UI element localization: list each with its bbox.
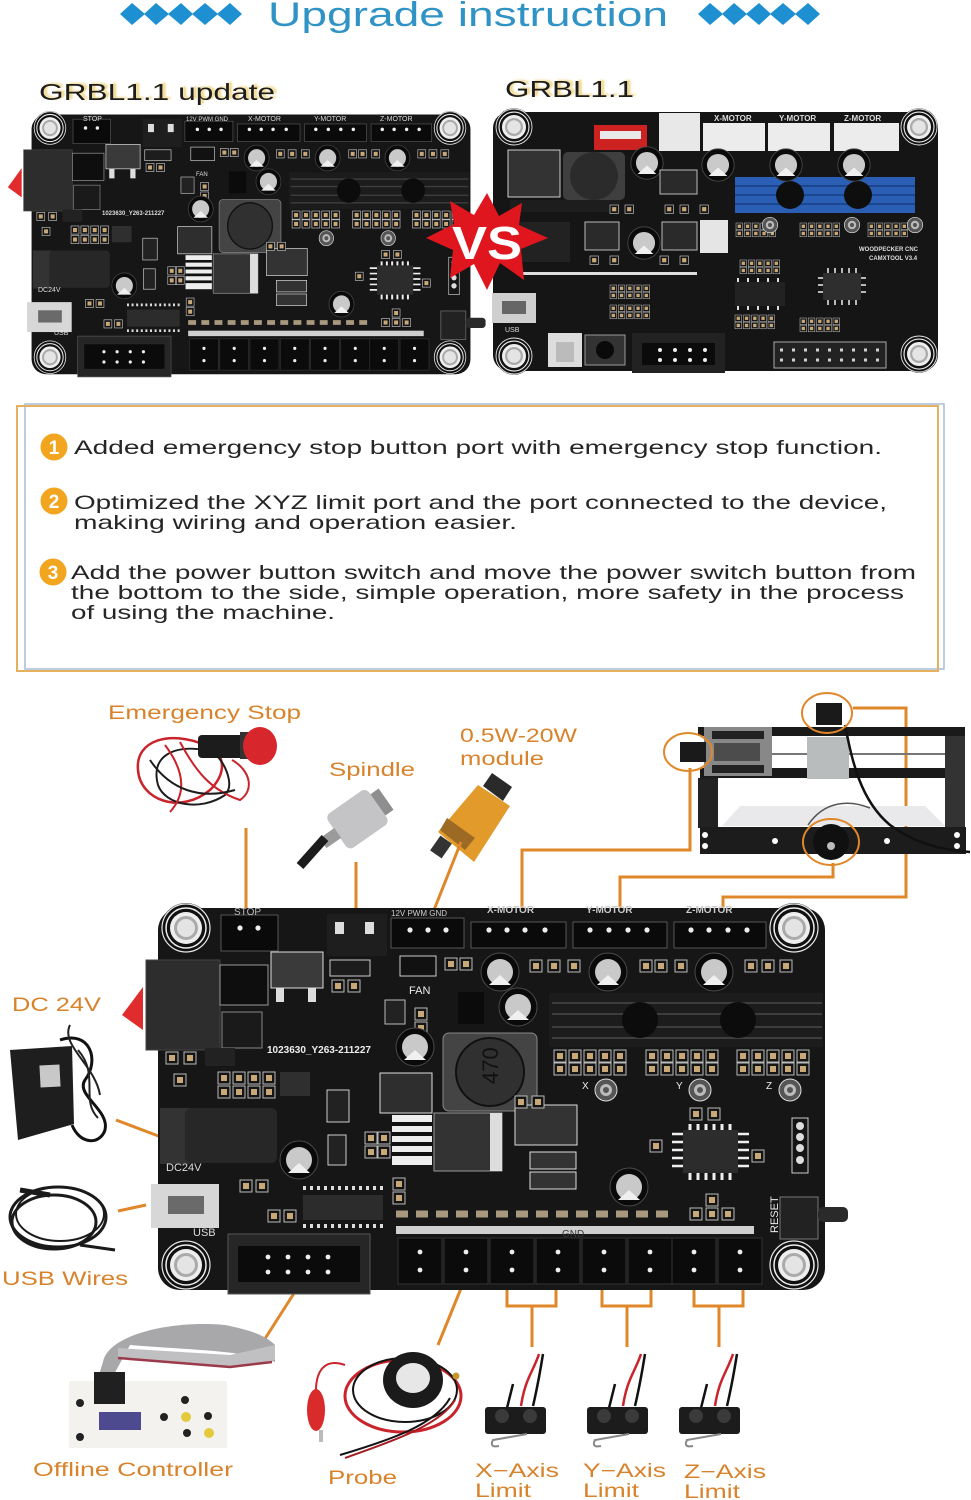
note 3 badge (40, 558, 66, 586)
board: GRBL1.1 update small photo: Z-MOTOR (380, 116, 413, 123)
heading: USB Wires: USB Wires (2, 1269, 128, 1290)
board: GRBL1.1 update small photo: 1023630_Y263-211227 (102, 211, 165, 217)
heading: Emergency Stop: Emergency Stop (108, 703, 301, 724)
note 2 text: Optimized the XYZ limit port and the port connected to the device, (74, 492, 887, 514)
heading: X-Axis Limit (475, 1461, 559, 1500)
heading: Y-Axis Limit (583, 1461, 666, 1500)
board: GRBL1.1 small photo: USB (505, 327, 520, 334)
board: main controller: USB (193, 1227, 216, 1239)
board: main controller: DC24V (166, 1162, 202, 1174)
board: GRBL1.1 update small photo: X-MOTOR (248, 116, 281, 123)
board: GRBL1.1 small photo: Z-MOTOR (844, 114, 881, 123)
heading: laser module: 0.5W-20W (460, 726, 577, 747)
board: main controller: 1023630_Y263-211227 (267, 1045, 371, 1056)
note 1 text: Added emergency stop button port with emergency stop function. (74, 437, 882, 459)
board: GRBL1.1 update small photo: DC24V (38, 287, 61, 294)
heading: laser module: module (460, 749, 544, 770)
heading: Spindle: Spindle (329, 760, 415, 781)
board: GRBL1.1 update small photo: STOP (83, 116, 102, 123)
heading: DC 24V: DC 24V (12, 995, 101, 1016)
icon: VS starburst (426, 193, 548, 290)
heading: laser module (460, 726, 577, 770)
icon: emergency stop button (138, 727, 277, 812)
board: GRBL1.1 small photo (492, 108, 938, 375)
icon: VS starburst: VS (452, 217, 522, 269)
board: GRBL1.1 update small photo: Y-MOTOR (314, 116, 346, 123)
note 1 badge (40, 434, 68, 460)
icon: CNC machine (664, 693, 970, 865)
note 2 text (74, 492, 887, 534)
heading: Probe: Probe (328, 1468, 397, 1489)
icon: offline controller (69, 1324, 275, 1448)
note 1 badge: 1 (49, 438, 60, 459)
board: GRBL1.1 small photo: CAMXTOOL V3.4 (869, 256, 918, 262)
note 2 badge (40, 488, 68, 514)
board: GRBL1.1 small photo: X-MOTOR (714, 114, 752, 123)
board: GRBL1.1 small photo: WOODPECKER CNC (859, 247, 919, 253)
note 3 text (71, 562, 916, 624)
board: main controller: Y-MOTOR (586, 905, 633, 916)
board: main controller: Y (676, 1081, 683, 1092)
note 3 text: of using the machine. (71, 602, 335, 624)
icon: X limit switch (485, 1354, 546, 1446)
title (120, 0, 820, 34)
icon: probe (307, 1352, 461, 1458)
note 3 text: Add the power button switch and move the power switch button from (71, 562, 916, 584)
heading: Z-Axis Limit (684, 1462, 766, 1500)
icon: right diamonds (698, 3, 820, 25)
board: main controller: X (582, 1081, 589, 1092)
note 3 text: the bottom to the side, simple operation, more safety in the process (71, 582, 904, 604)
heading: Y-Axis Limit: Y−Axis (583, 1461, 666, 1482)
note 2 badge: 2 (49, 492, 59, 513)
board: GRBL1.1 update small photo (8, 111, 486, 377)
board: GRBL1.1 update small photo: FAN (196, 172, 208, 178)
board: GRBL1.1 small photo: Y-MOTOR (779, 114, 816, 123)
icon: spindle motor (300, 782, 398, 866)
board: main controller: Z (766, 1081, 772, 1092)
note 2 text: making wiring and operation easier. (74, 512, 517, 534)
connector lines (116, 708, 906, 1347)
panel: upgrade notes (17, 404, 944, 671)
board: GRBL1.1 update small photo: 12V PWM GND (186, 117, 229, 123)
icon: power adapter (10, 1025, 105, 1141)
board: main controller: GND (562, 1229, 584, 1240)
label: GRBL1.1: GRBL1.1 (505, 76, 634, 102)
board: main controller (122, 903, 848, 1294)
icon: Y limit switch (587, 1354, 648, 1446)
heading: X-Axis Limit: X−Axis (475, 1461, 559, 1482)
board: GRBL1.1 update small photo: USB (54, 330, 69, 337)
icon: Z limit switch (679, 1354, 740, 1446)
board: main controller: FAN (409, 985, 430, 997)
board: main controller: X-MOTOR (487, 905, 535, 916)
label: GRBL1.1 update: GRBL1.1 update (39, 79, 275, 105)
heading: Z-Axis Limit: Z−Axis (684, 1462, 766, 1483)
board: main controller: 12V PWM GND (391, 909, 447, 918)
board: main controller: Z-MOTOR (686, 905, 733, 916)
icon: USB cable (10, 1187, 115, 1250)
icon: laser module (430, 773, 512, 862)
board: main controller: STOP (234, 907, 261, 918)
note 3 badge: 3 (48, 563, 58, 584)
icon: left diamonds (120, 3, 242, 25)
board: main controller: RESET (769, 1196, 781, 1233)
board: main controller: 470 (478, 1047, 503, 1084)
heading: Offline Controller: Offline Controller (33, 1460, 234, 1481)
